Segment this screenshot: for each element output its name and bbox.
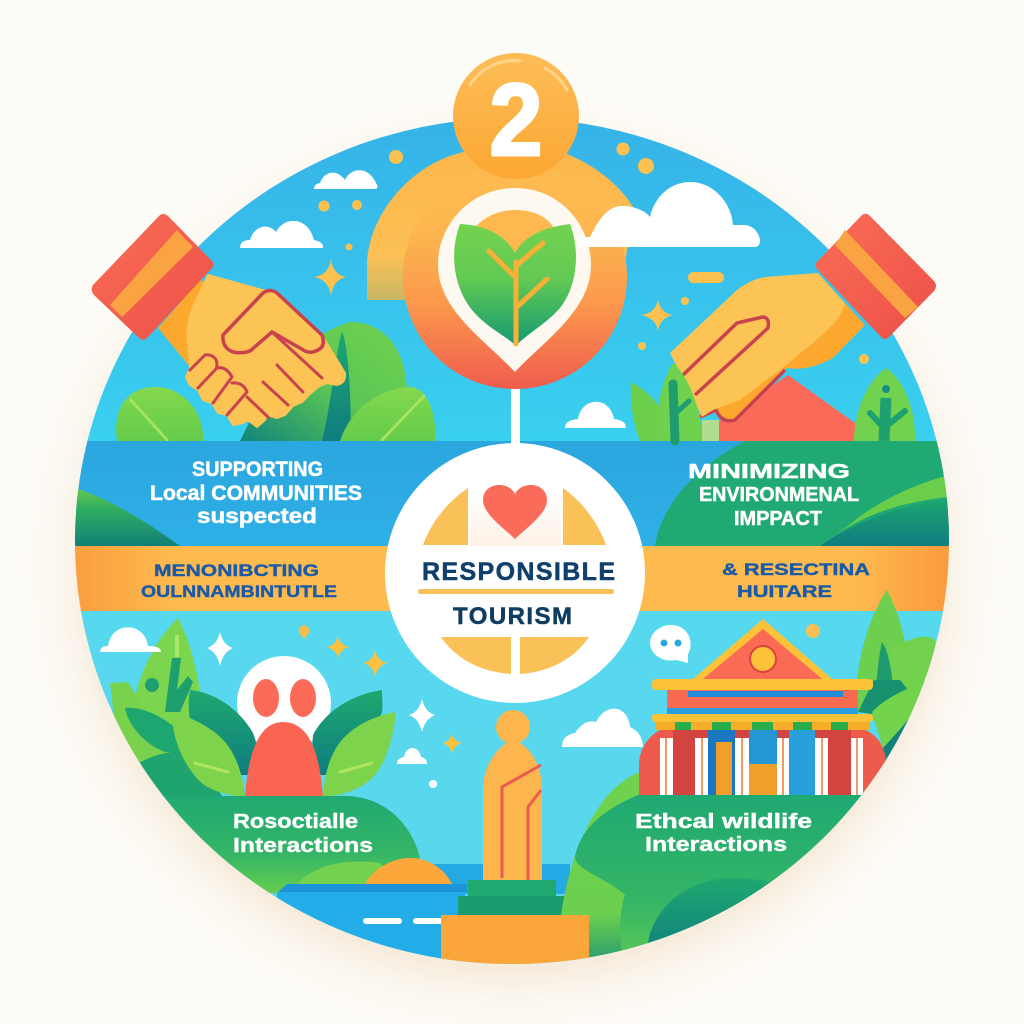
center white badge: [385, 443, 645, 703]
divider: [418, 589, 614, 594]
bottom-right segment: [520, 637, 589, 674]
lower-left green mound: [164, 796, 452, 893]
leaf veins: [489, 243, 547, 344]
label: right orange band: HUITARE: [737, 582, 832, 601]
label: supporting local communities: suspected: [197, 505, 317, 528]
lower-left foliage: [110, 618, 225, 800]
label: supporting local communities: [150, 458, 362, 528]
person in leaves: [172, 656, 396, 797]
right hand: [670, 214, 936, 422]
heart: [483, 485, 547, 539]
house roof: [718, 375, 855, 441]
statue base: [441, 915, 589, 965]
statue on steps: [458, 710, 570, 915]
label: respectable interactions: Rosoctialle: [233, 811, 358, 833]
label: ethical wildlife interactions: [635, 811, 812, 856]
leaf: [454, 224, 576, 346]
orange dome: [367, 150, 633, 300]
lower sparkles, clouds and speech bubble: [100, 624, 820, 788]
label: left orange band: OULNNAMBINTUTLE: [141, 582, 337, 601]
label: ethical wildlife interactions: Interactions: [645, 834, 787, 856]
title: tourism: TOURISM: [453, 603, 572, 630]
connector line: [511, 385, 520, 445]
label: right orange band: [722, 560, 870, 601]
soft disc shadow: [76, 150, 948, 982]
label: left orange band: [141, 561, 337, 601]
top-right segment: [563, 488, 606, 545]
sea: [277, 864, 570, 962]
upper sky: [60, 110, 970, 442]
white shield: [438, 188, 591, 372]
label: minimizing environmental impact: MINIMIZING: [688, 461, 850, 483]
orange band: [60, 546, 970, 611]
lower-right green hills: [558, 772, 867, 962]
clouds and sparkles upper: [240, 142, 869, 428]
sun behind leaf: [472, 210, 556, 260]
step number badge: [453, 53, 579, 179]
label: supporting local communities: Local COMMUNITIES: [150, 482, 362, 505]
upper-left bushes: [116, 322, 435, 441]
step number badge: 2: [490, 63, 542, 177]
label: minimizing environmental impact: IMPPACT: [734, 508, 822, 530]
right foliage: [857, 590, 935, 763]
upper-right plants: [631, 363, 915, 441]
label: respectable interactions: [233, 811, 373, 857]
label: right orange band: & RESECTINA: [722, 560, 870, 579]
label: minimizing environmental impact: [688, 461, 859, 530]
label: ethical wildlife interactions: Ethcal wildlife: [635, 811, 812, 833]
left hand: [92, 214, 345, 427]
lower sky: [60, 611, 970, 971]
title: responsible: RESPONSIBLE: [422, 558, 615, 586]
temple: [639, 619, 886, 795]
label: respectable interactions: Interactions: [233, 835, 373, 857]
large gradient circle with leaf emblem: [403, 165, 627, 389]
bottom-left segment: [441, 637, 511, 674]
label: minimizing environmental impact: ENVIRONMENAL: [699, 484, 859, 506]
label: left orange band: MENONIBCTING: [154, 561, 319, 580]
main circular scene: [60, 110, 970, 980]
top-left segment: [423, 488, 468, 545]
large cloud: [577, 182, 760, 247]
blue band: [60, 441, 970, 546]
label: supporting local communities: SUPPORTING: [192, 458, 323, 481]
heart glow: [470, 490, 561, 546]
